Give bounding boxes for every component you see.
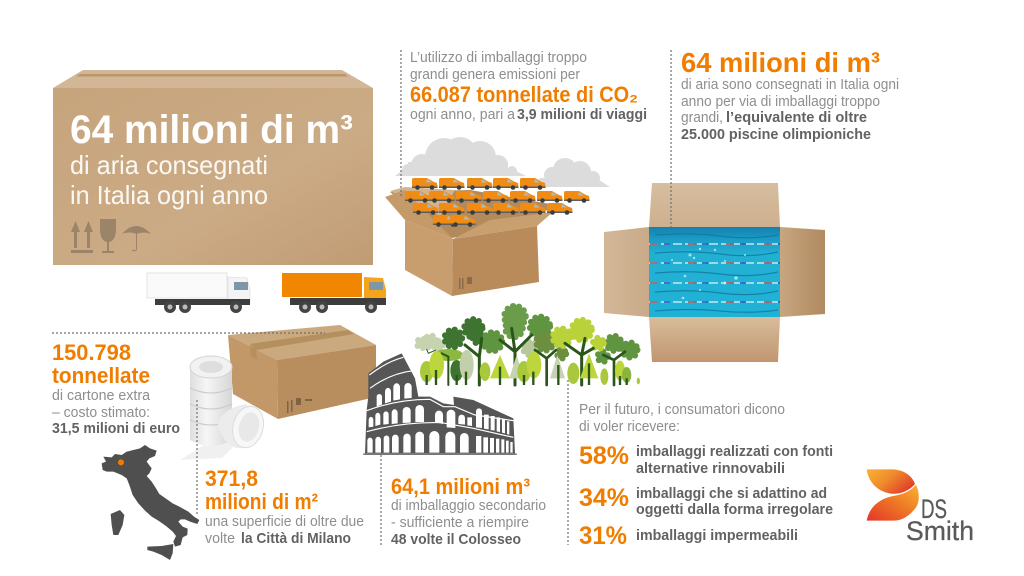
text block: 64 million m3 pools: 25.000 piscine olimpioniche — [681, 126, 871, 143]
text block: 64 million m3 pools: di aria sono consegnati in Italia ogni — [681, 76, 899, 93]
stat: 31%: 31% — [579, 522, 627, 550]
pool water — [649, 227, 780, 317]
stat: 31%: imballaggi impermeabili — [636, 527, 798, 544]
icon: packing tape rolls — [180, 356, 268, 460]
text block: CO2 emissions: grandi genera emissioni per — [410, 66, 580, 83]
icon: this way up arrows — [71, 221, 93, 253]
text block: 64 million m3 pools: 64 milioni di m³ — [681, 47, 880, 78]
icon: small closed cardboard box — [228, 325, 376, 419]
text block: 150.798 tonnes: – costo stimato: — [52, 404, 150, 421]
text block: 371,8 million m2: 371,8 — [205, 466, 258, 491]
text block: CO2 emissions: 3,9 milioni di viaggi — [517, 106, 647, 123]
stat: 58%: 58% — [579, 442, 629, 470]
heading: big box title: 64 milioni di m³ — [70, 108, 353, 152]
text block: 371,8 million m2 — [197, 400, 364, 547]
text block: consumer preferences: di voler ricevere: — [579, 418, 680, 435]
icon: Colosseum — [363, 353, 517, 455]
stat: 34%: oggetti dalla forma irregolare — [636, 501, 833, 518]
text block: 64 million m3 pools: grandi, — [681, 109, 723, 126]
icon: box with swimming pool — [604, 183, 825, 362]
icon: map of Italy — [102, 445, 199, 560]
text block: consumer preferences: Per il futuro, i consumatori dicono — [579, 401, 785, 418]
clouds — [395, 137, 610, 187]
icon: forest of trees — [417, 306, 640, 385]
icon: open cardboard box with vans — [385, 178, 590, 296]
orange truck — [282, 273, 386, 313]
white truck — [147, 273, 250, 313]
logo: DS Smith — [867, 469, 974, 546]
vans — [405, 178, 590, 227]
logo: DS Smith: DS — [921, 494, 947, 524]
logo: DS Smith: Smith — [906, 516, 974, 546]
text: big box subtitle: di aria consegnati — [70, 150, 268, 180]
panel: big cardboard box — [53, 70, 373, 265]
text block: CO2 emissions: L’utilizzo di imballaggi troppo — [410, 49, 587, 66]
text block: CO2 emissions: ogni anno, pari a — [410, 106, 516, 123]
icon: fragile glass — [100, 219, 116, 253]
stat: 58%: alternative rinnovabili — [636, 460, 785, 477]
text block: 150.798 tonnes: 31,5 milioni di euro — [52, 420, 180, 437]
text block: 64 million m3 pools — [671, 47, 899, 227]
text block: 64,1 million m3 — [381, 455, 546, 548]
stat: 58% — [579, 442, 833, 477]
stat: 34% — [579, 484, 833, 518]
text block: 150.798 tonnes: 150.798 — [52, 340, 131, 365]
stat: 34%: 34% — [579, 484, 629, 512]
text block: consumer preferences — [568, 380, 833, 550]
text block: 150.798 tonnes: di cartone extra — [52, 387, 151, 404]
text block: 64,1 million m3: - sufficiente a riempire — [391, 514, 529, 531]
text block: 150.798 tonnes: tonnellate — [52, 363, 150, 388]
text: big box subtitle: in Italia ogni anno — [70, 180, 268, 210]
icon: umbrella keep dry — [122, 226, 151, 251]
text block: 150.798 tonnes — [52, 333, 325, 437]
text block: 371,8 million m2: milioni di m² — [205, 489, 318, 514]
text: big box subtitle — [70, 150, 268, 210]
text block: 64,1 million m3: di imballaggio secondario — [391, 497, 546, 514]
stat: 58%: imballaggi realizzati con fonti — [636, 443, 833, 460]
text block: 64,1 million m3: 48 volte il Colosseo — [391, 531, 521, 548]
stat: 34%: imballaggi che si adattino ad — [636, 485, 827, 502]
stat: 31% — [579, 522, 798, 550]
text block: CO2 emissions — [401, 49, 647, 198]
text block: 371,8 million m2: una superficie di oltre due — [205, 513, 364, 530]
text block: 371,8 million m2: la Città di Milano — [241, 530, 351, 547]
text block: 371,8 million m2: volte — [205, 530, 235, 547]
text block: 64 million m3 pools: anno per via di imballaggi troppo — [681, 93, 880, 110]
text block: 64 million m3 pools: l’equivalente di oltre — [726, 109, 867, 126]
text block: 64,1 million m3: 64,1 milioni m³ — [391, 474, 530, 499]
text block: CO2 emissions: 66.087 tonnellate di CO₂ — [410, 82, 638, 107]
